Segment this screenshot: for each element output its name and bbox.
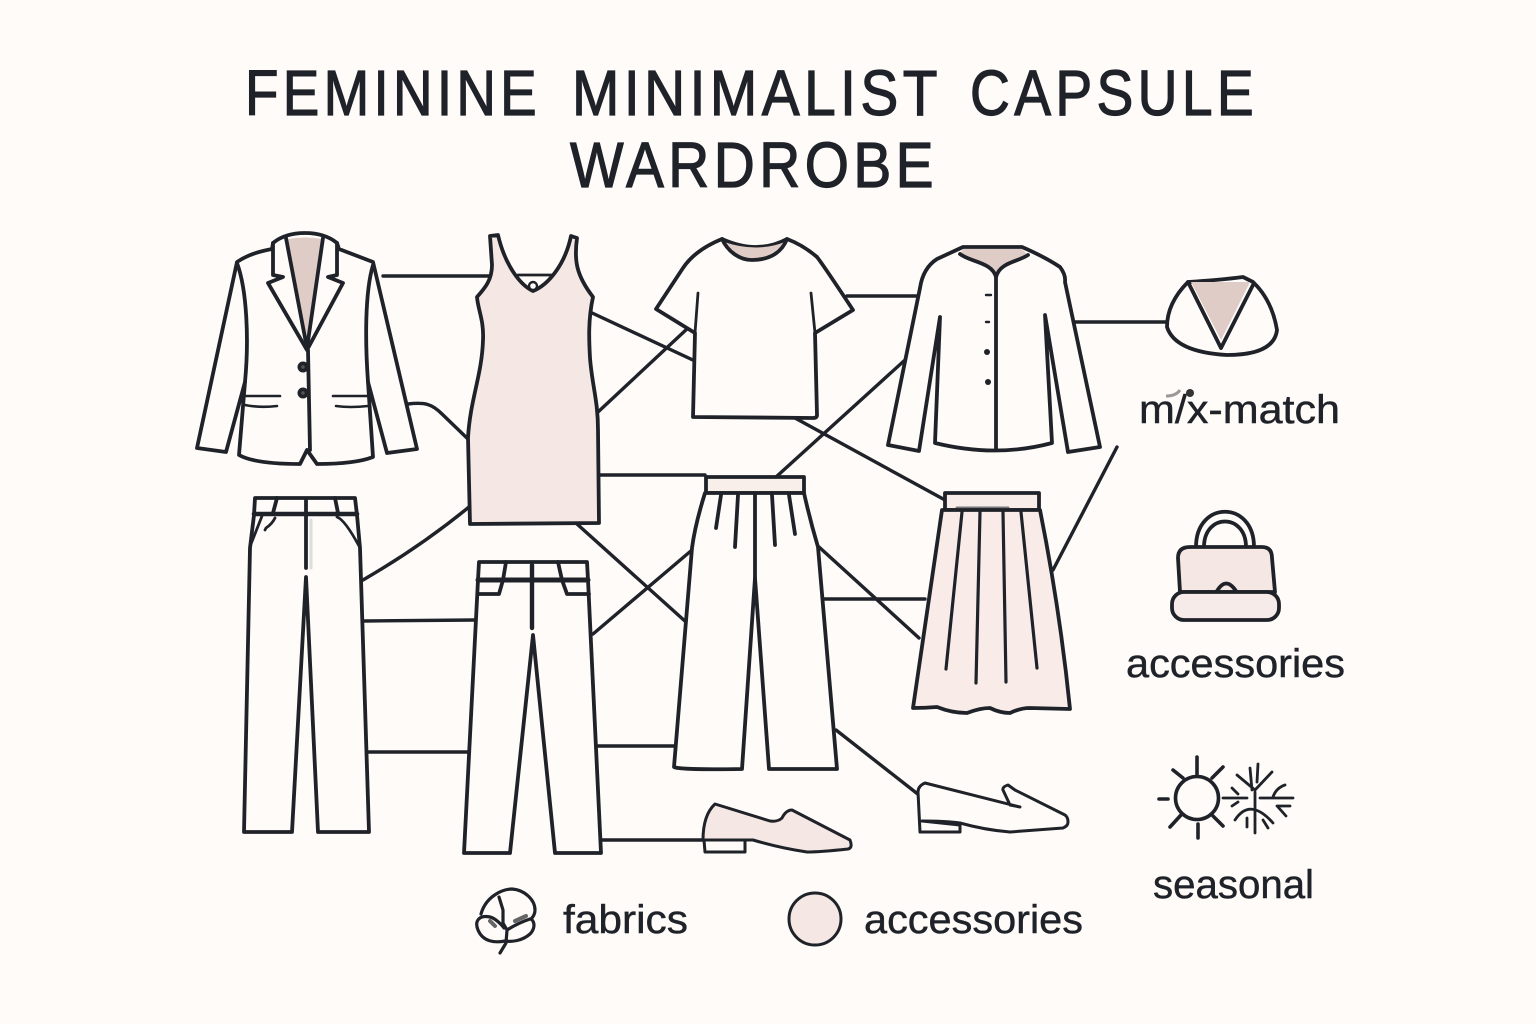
title: CAPSULE [970,57,1258,129]
garment: loafer [918,783,1068,832]
icon: cotton fabrics [477,889,535,953]
icon: handbag [1172,512,1279,620]
icon: blush swatch [789,893,841,945]
label: mix-match: m/x-match [1139,388,1340,432]
garment: wide-leg trousers [674,477,837,769]
label: accessories legend: accessories [864,898,1083,942]
label: seasonal: seasonal [1153,863,1314,907]
icon: snowflake [1223,764,1293,833]
title: FEMININE [245,57,541,129]
garment: cardigan [888,247,1100,452]
icon: sun [1159,757,1223,838]
garment: pleated skirt [913,493,1070,713]
title: WARDROBE [570,129,938,201]
icon: neck scarf [1167,277,1277,355]
garment: blush flat shoe [703,804,851,852]
garment: straight trousers [464,562,601,853]
connector lines between garments [363,276,1167,840]
label: accessories: accessories [1126,642,1345,686]
garment: t-shirt [656,239,853,418]
title [245,57,1258,201]
label: fabrics: fabrics [563,898,688,942]
garment: blazer [197,233,417,464]
title: MINIMALIST [572,57,942,129]
garment: slip dress [468,235,599,524]
garment: slim trousers [244,498,369,832]
